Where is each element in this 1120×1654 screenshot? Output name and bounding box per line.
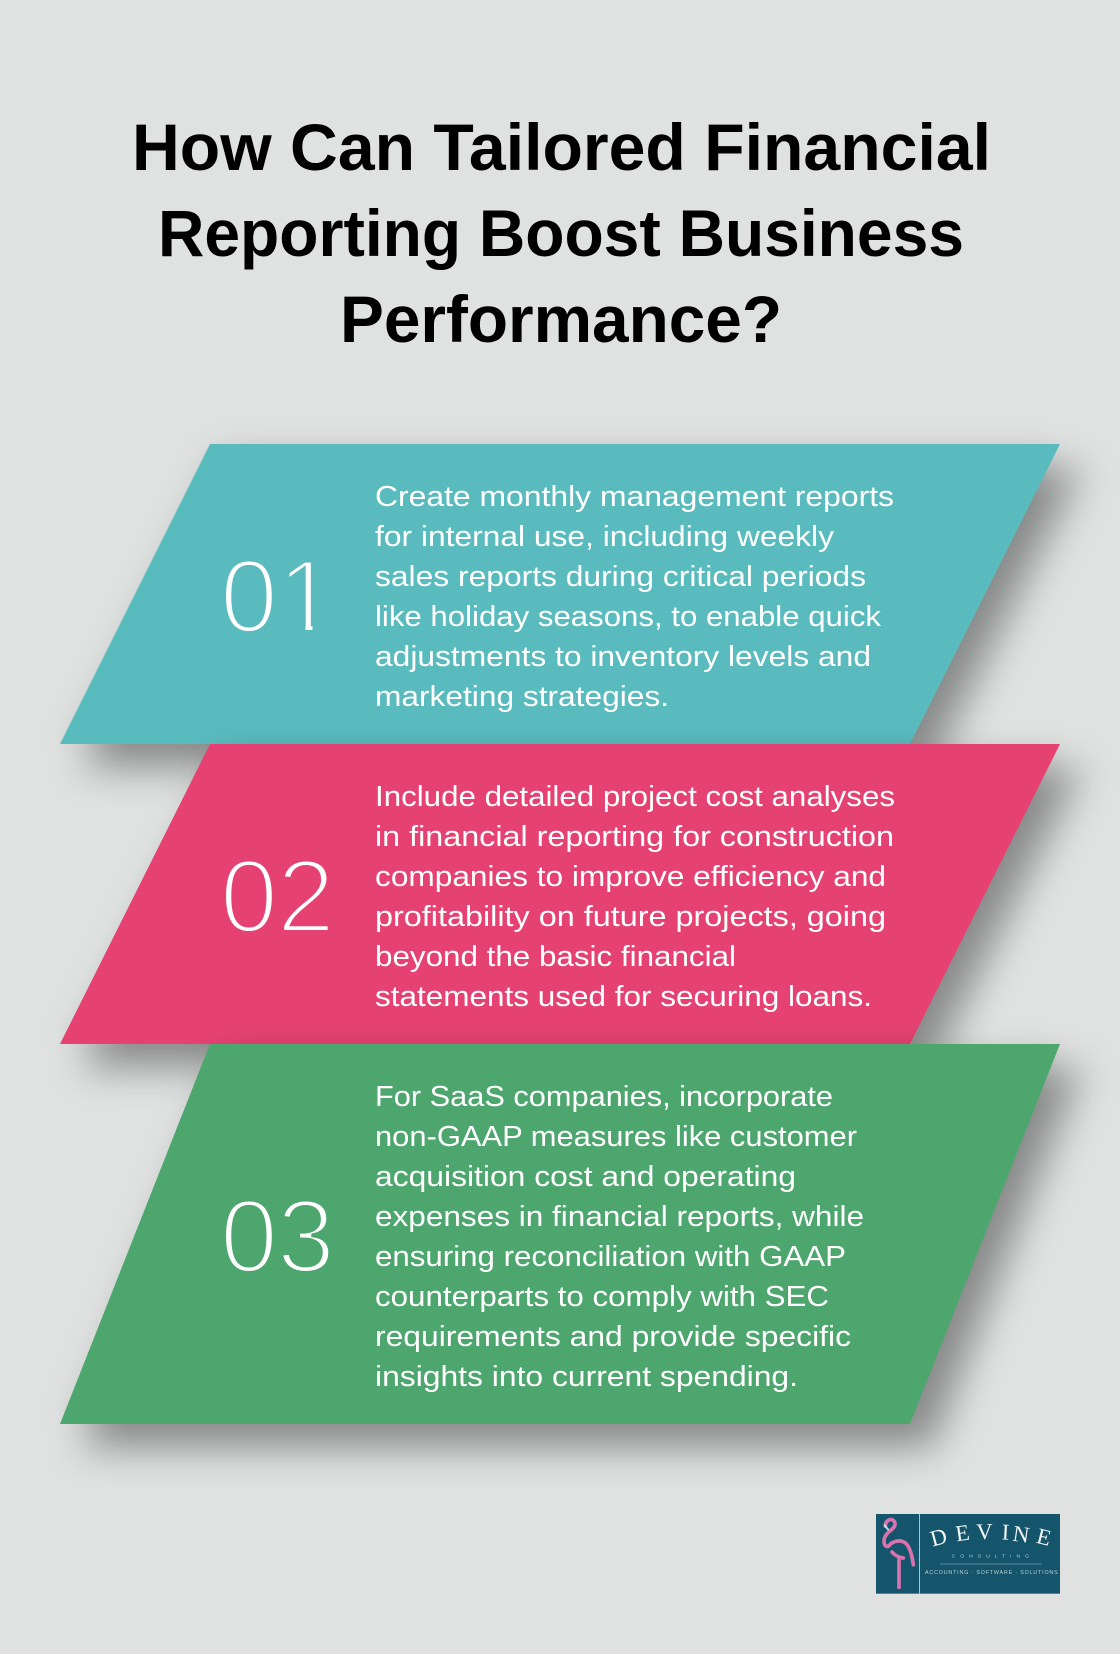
logo subtitle: CONSULTING bbox=[952, 1553, 1029, 1559]
text: step 02 description: statements used for securing loans. bbox=[375, 981, 872, 1013]
number 02: 2 bbox=[277, 839, 335, 955]
number 01: 0 bbox=[220, 539, 278, 655]
panel: step 02 bbox=[60, 744, 1060, 1044]
text: step 03 description: For SaaS companies, incorporate bbox=[375, 1081, 833, 1113]
panel: step 01 bbox=[60, 444, 1060, 744]
title: Performance? bbox=[340, 282, 782, 356]
green parallelogram bbox=[60, 1044, 1060, 1424]
text: step 01 description: sales reports during critical periods bbox=[375, 561, 866, 593]
number 03 bbox=[220, 1179, 335, 1295]
text: step 03 description: requirements and provide specific bbox=[375, 1321, 851, 1353]
logo: Devine Consulting bbox=[876, 1514, 1060, 1594]
title bbox=[132, 110, 991, 356]
text: step 03 description: counterparts to comply with SEC bbox=[375, 1281, 829, 1313]
text: step 01 description: like holiday seasons, to enable quick bbox=[375, 601, 882, 633]
text: step 02 description bbox=[375, 781, 895, 1013]
text: step 03 description: insights into current spending. bbox=[375, 1361, 798, 1393]
logo wordmark: D bbox=[927, 1523, 950, 1551]
logo wordmark: E bbox=[954, 1520, 971, 1546]
pink parallelogram bbox=[60, 744, 1060, 1044]
number 01 bbox=[226, 562, 312, 631]
number 02 bbox=[220, 839, 335, 955]
text: step 03 description bbox=[375, 1081, 864, 1393]
text: step 01 description: adjustments to inventory levels and bbox=[375, 641, 871, 673]
text: step 01 description: Create monthly management reports bbox=[375, 481, 894, 513]
logo wordmark: E bbox=[1034, 1523, 1054, 1551]
logo wordmark: V bbox=[976, 1519, 994, 1544]
number 03: 3 bbox=[277, 1179, 335, 1295]
text: step 01 description bbox=[375, 481, 894, 713]
number 03: 0 bbox=[220, 1179, 278, 1295]
title: How Can Tailored Financial bbox=[132, 110, 991, 184]
number 02: 0 bbox=[220, 839, 278, 955]
teal parallelogram bbox=[60, 444, 1060, 744]
icon: flamingo bbox=[884, 1520, 913, 1587]
text: step 03 description: non-GAAP measures like customer bbox=[375, 1121, 857, 1153]
text: step 01 description: for internal use, including weekly bbox=[375, 521, 835, 553]
text: step 02 description: in financial reporting for construction bbox=[375, 821, 894, 853]
text: step 02 description: beyond the basic financial bbox=[375, 941, 736, 973]
text: step 01 description: marketing strategies. bbox=[375, 681, 669, 713]
text: step 02 description: companies to improve efficiency and bbox=[375, 861, 886, 893]
text: step 03 description: expenses in financial reports, while bbox=[375, 1201, 864, 1233]
text: step 03 description: ensuring reconciliation with GAAP bbox=[375, 1241, 846, 1273]
text: step 02 description: Include detailed project cost analyses bbox=[375, 781, 895, 813]
title: Reporting Boost Business bbox=[158, 196, 964, 270]
number 01: 1 bbox=[278, 539, 335, 655]
logo wordmark bbox=[927, 1519, 1054, 1551]
logo tagline: ACCOUNTING · SOFTWARE · SOLUTIONS bbox=[925, 1570, 1058, 1576]
text: step 03 description: acquisition cost and operating bbox=[375, 1161, 796, 1193]
logo wordmark: N bbox=[1011, 1521, 1031, 1548]
text: step 02 description: profitability on future projects, going bbox=[375, 901, 886, 933]
logo wordmark: I bbox=[1001, 1519, 1010, 1545]
panel: step 03 bbox=[60, 1044, 1060, 1424]
